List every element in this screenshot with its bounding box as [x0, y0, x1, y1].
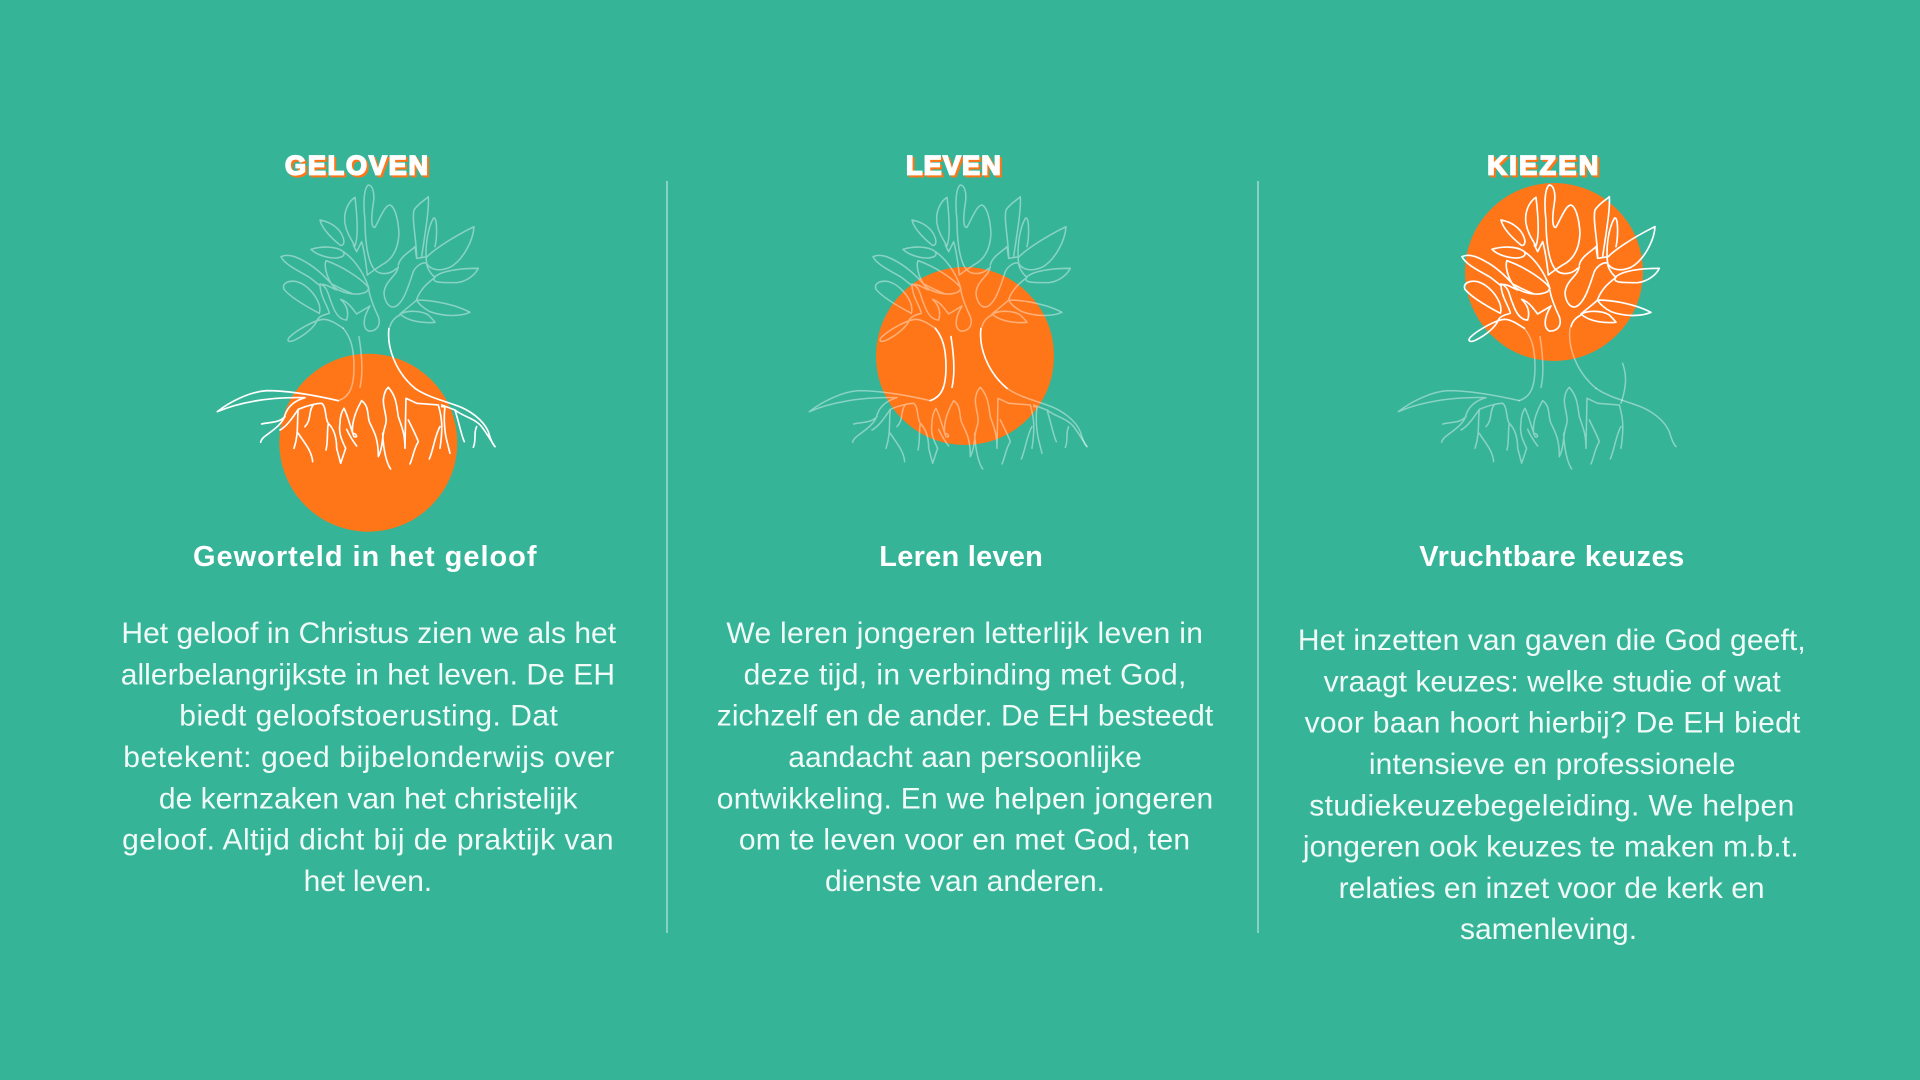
text block: geloven description: Het geloof in Christus zien we als het [121, 617, 617, 650]
text block: geloven description: het leven. [304, 865, 432, 898]
heading: vruchtbare keuzes: Vruchtbare keuzes [1419, 541, 1684, 573]
text block: kiezen description: vraagt keuzes: welke studie of wat [1324, 665, 1781, 698]
column divider left [666, 181, 668, 933]
text block: leven description: We leren jongeren letterlijk leven in [726, 617, 1203, 650]
title: leven: LEVEN [906, 150, 1001, 180]
title: geloven: GELOVEN [285, 150, 428, 180]
illustration: tree with highlighted crown [1398, 185, 1676, 469]
text block: geloven description [121, 617, 617, 898]
text block: kiezen description: relaties en inzet voor de kerk en [1339, 872, 1765, 905]
text block: leven description: dienste van anderen. [825, 865, 1105, 898]
illustration: tree with highlighted roots [217, 185, 495, 469]
text block: geloven description: de kernzaken van het christelijk [159, 782, 578, 815]
panel: leven [717, 150, 1214, 898]
text block: leven description: aandacht aan persoonlijke [788, 741, 1142, 774]
heading: geworteld in het geloof: Geworteld in het geloof [193, 541, 537, 573]
illustration: orange circle behind tree trunk [876, 267, 1054, 445]
text block: kiezen description [1298, 624, 1806, 946]
text block: kiezen description: jongeren ook keuzes te maken m.b.t. [1302, 831, 1799, 864]
text block: geloven description: biedt geloofstoerusting. Dat [179, 700, 559, 733]
heading: leren leven: Leren leven [879, 541, 1043, 573]
text block: kiezen description: intensieve en professionele [1369, 748, 1735, 781]
panel: kiezen [1298, 150, 1806, 946]
text block: kiezen description: studiekeuzebegeleiding. We helpen [1309, 789, 1794, 822]
text block: geloven description: betekent: goed bijbelonderwijs over [123, 741, 614, 774]
text block: leven description [717, 617, 1214, 898]
text block: geloven description: geloof. Altijd dicht bij de praktijk van [122, 824, 614, 857]
text block: leven description: zichzelf en de ander. De EH besteedt [717, 700, 1214, 733]
text block: leven description: om te leven voor en met God, ten [739, 824, 1190, 857]
column divider right [1257, 181, 1259, 933]
illustration: orange circle behind tree crown [1465, 183, 1643, 361]
panel: geloven [121, 150, 617, 898]
text block: leven description: ontwikkeling. En we helpen jongeren [717, 782, 1213, 815]
text block: leven description: deze tijd, in verbinding met God, [744, 658, 1186, 691]
text block: geloven description: allerbelangrijkste in het leven. De EH [121, 658, 615, 691]
illustration: tree with highlighted trunk [809, 185, 1087, 469]
illustration: orange circle behind tree roots [279, 354, 457, 532]
text block: kiezen description: Het inzetten van gaven die God geeft, [1298, 624, 1806, 657]
text block: kiezen description: voor baan hoort hierbij? De EH biedt [1305, 707, 1801, 740]
text block: kiezen description: samenleving. [1460, 913, 1637, 946]
title: kiezen: KIEZEN [1487, 150, 1598, 180]
